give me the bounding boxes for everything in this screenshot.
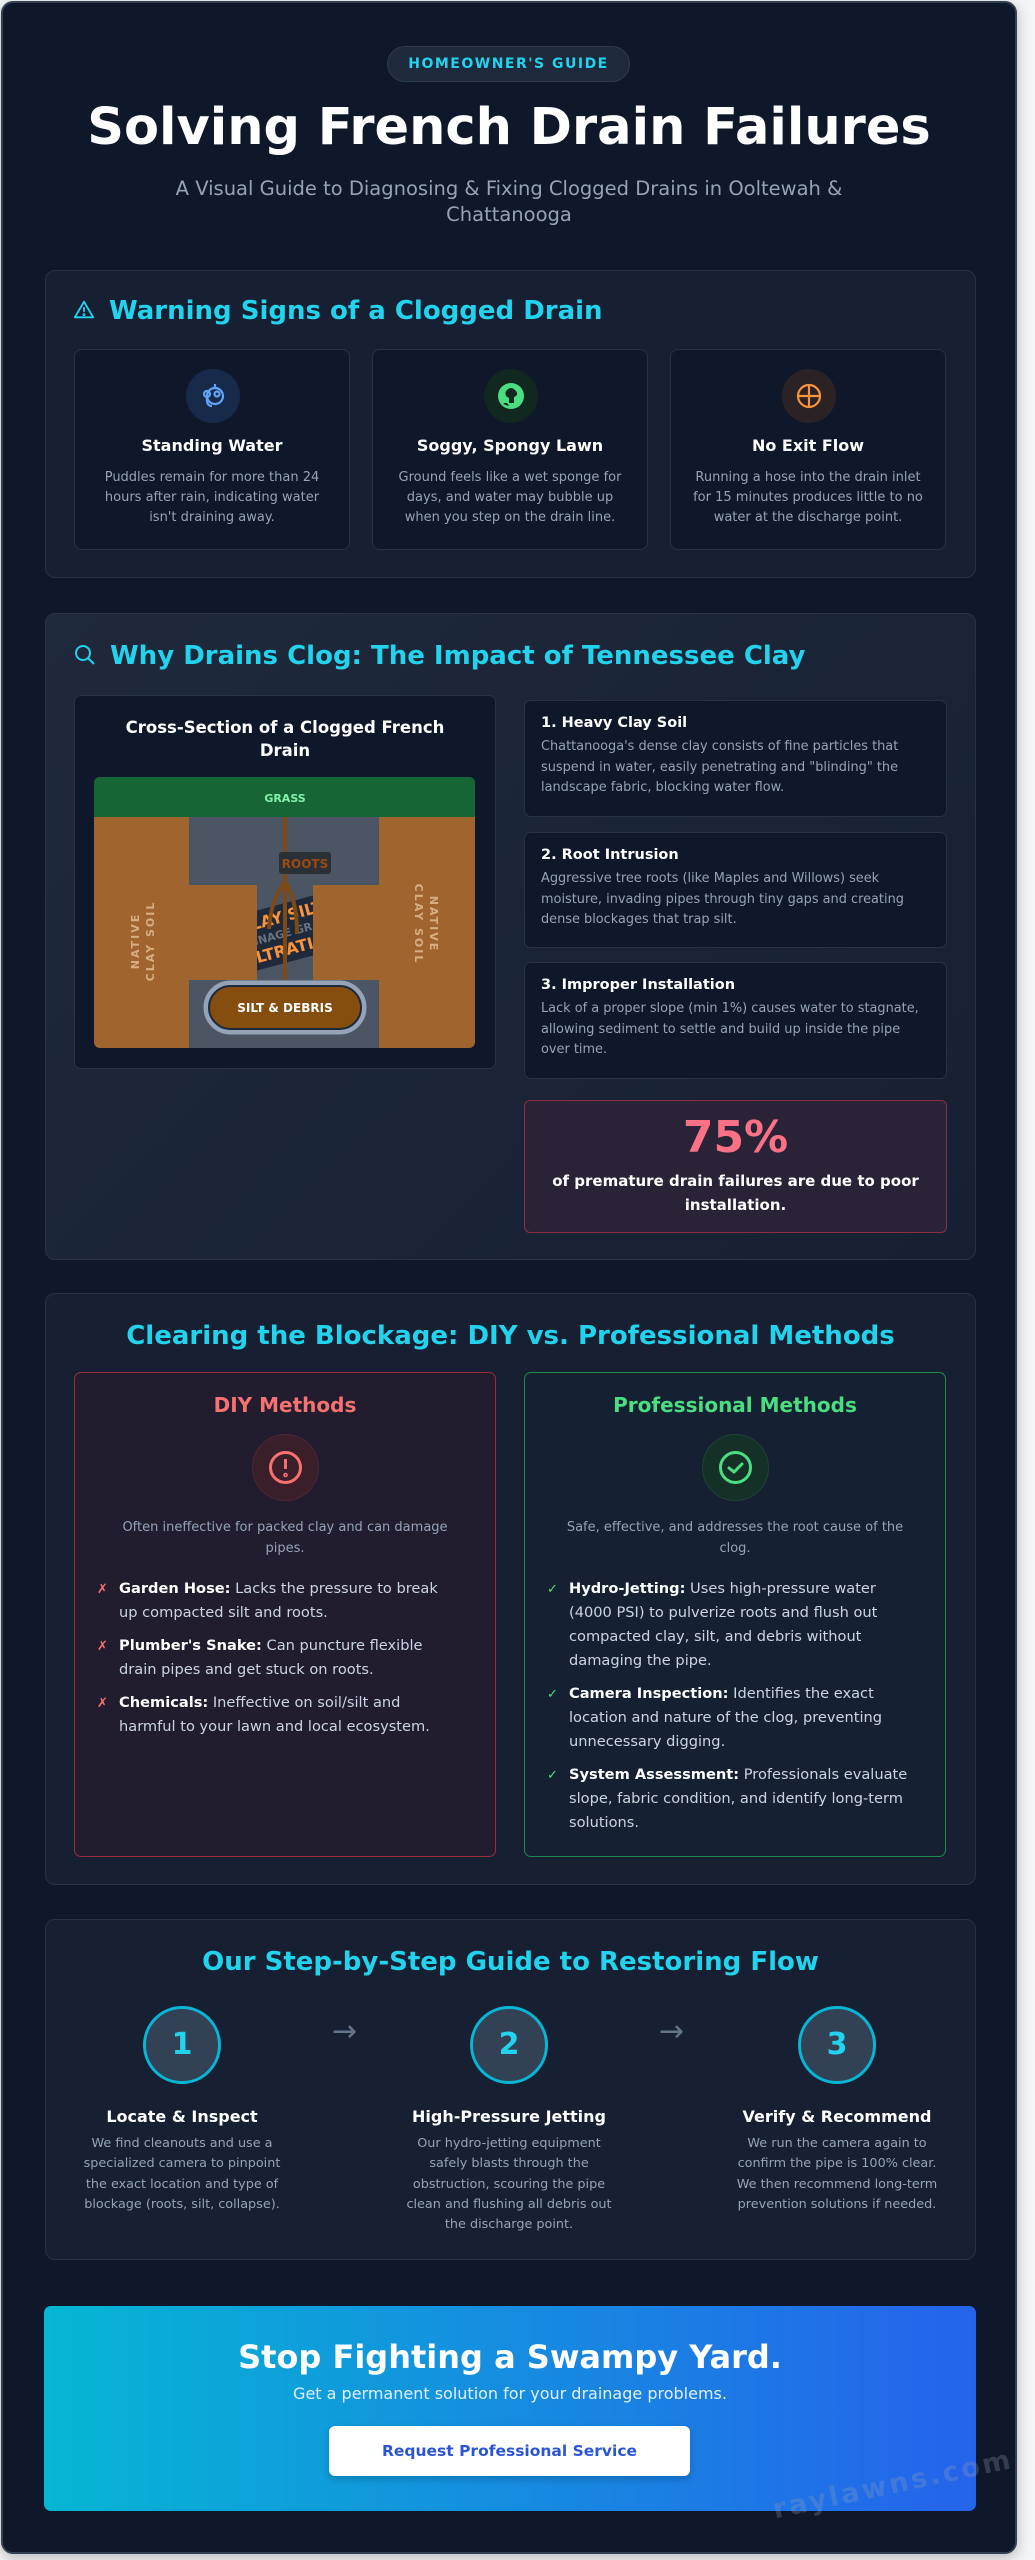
card: DIY methods: DIY Methods [214, 1393, 356, 1417]
stat callout: 75%: of premature drain failures are due to poor installation. [552, 1172, 919, 1214]
cause: improper installation [524, 962, 947, 1079]
card: professional methods: ✓ [547, 1582, 558, 1597]
cross-section diagram: CLAY SILT [237, 897, 325, 937]
cross-section diagram: CLAY SOIL [412, 884, 425, 964]
panel: why drains clog [45, 613, 976, 1260]
card: no exit flow: Running a hose into the drain inlet for 15 minutes produces little to no water at the discharge point. [693, 470, 923, 525]
cross-section diagram: CLAY SOIL [144, 901, 157, 981]
heading: warning signs: Warning Signs of a Clogged Drain [109, 296, 603, 326]
step 2: 2 [499, 2027, 519, 2062]
cause: heavy clay: Chattanooga's dense clay consists of fine particles that suspend in water, easily penetrating and "blinding" the landscape fabric, blocking water flow. [541, 739, 898, 795]
cause: heavy clay [524, 700, 947, 817]
step 3 [737, 2006, 937, 2212]
panel: warning signs [45, 270, 976, 578]
step 1: We find cleanouts and use a specialized camera to pinpoint the exact location and type of blockage (roots, silt, collapse). [84, 2136, 280, 2212]
heading: why drains clog: Why Drains Clog: The Impact of Tennessee Clay [110, 641, 806, 671]
icon: water [186, 369, 240, 423]
stat callout: 75% [524, 1100, 947, 1233]
card: DIY methods: ✗ [97, 1696, 108, 1711]
card: DIY methods: Garden Hose: Lacks the pressure to break up compacted silt and roots. [119, 1580, 438, 1621]
card: professional methods [524, 1372, 946, 1857]
card: professional methods: ✓ [547, 1687, 558, 1702]
card: professional methods: ✓ [547, 1768, 558, 1783]
card: professional methods: Professional Methods [613, 1393, 857, 1417]
diagram title: Cross-Section of a Clogged French Drain [126, 718, 444, 760]
card: no exit flow: No Exit Flow [752, 436, 864, 455]
cause: root intrusion: 2. Root Intrusion [541, 847, 679, 863]
panel: step-by-step guide [45, 1919, 976, 2260]
cross-section diagram: NATIVE [427, 896, 440, 952]
card: standing water [74, 349, 350, 550]
CTA banner [44, 2306, 976, 2511]
panel: DIY vs professional [45, 1293, 976, 1885]
CTA button [329, 2426, 690, 2476]
cross-section diagram: DRAINAGE GRAVEL [227, 912, 343, 955]
step 1: 1 [172, 2027, 192, 2062]
card: DIY methods [74, 1372, 496, 1857]
heading: step-by-step: Our Step-by-Step Guide to Restoring Flow [202, 1947, 819, 1977]
card: standing water: Standing Water [142, 436, 282, 455]
icon: check [702, 1434, 769, 1501]
cause: improper installation: Lack of a proper slope (min 1%) causes water to stagnate, allowing sediment to settle and build up inside the pipe over time. [541, 1001, 919, 1057]
card: soggy lawn: Ground feels like a wet sponge for days, and water may bubble up when you step on the drain line. [399, 470, 621, 525]
cross-section diagram: FILTRATION [237, 926, 342, 971]
icon: no flow [782, 369, 836, 423]
cause: root intrusion [524, 832, 947, 948]
step 1: Locate & Inspect [106, 2107, 258, 2126]
card: DIY methods: ✗ [97, 1639, 108, 1654]
watermark: raylawns.com [770, 2444, 1016, 2525]
cross-section diagram: GRASS [264, 792, 306, 805]
card: professional methods: Safe, effective, and addresses the root cause of the clog. [567, 1520, 903, 1556]
step 3: 3 [827, 2027, 847, 2062]
icon: lawn [484, 369, 538, 423]
cause: improper installation: 3. Improper Installation [541, 977, 735, 993]
CTA button: Request Professional Service [382, 2442, 637, 2460]
stat callout: 75%: 75% [683, 1112, 788, 1163]
card: no exit flow [670, 349, 946, 550]
step 3: We run the camera again to confirm the pipe is 100% clear. We then recommend long-term prevention solutions if needed. [737, 2136, 937, 2212]
title: Solving French Drain Failures [87, 98, 931, 157]
card: standing water: Puddles remain for more than 24 hours after rain, indicating water isn't draining away. [105, 470, 319, 525]
step 2 [406, 2006, 612, 2232]
heading: clearing the blockage: Clearing the Blockage: DIY vs. Professional Methods [126, 1321, 895, 1351]
badge [387, 46, 630, 82]
CTA subtext: Get a permanent solution for your drainage problems. [293, 2384, 727, 2403]
step 1 [84, 2006, 280, 2212]
arrow 1: → [332, 2014, 357, 2049]
cross-section diagram [94, 777, 475, 1048]
cross-section diagram: ROOTS [282, 857, 328, 871]
step 2: Our hydro-jetting equipment safely blasts through the obstruction, scouring the pipe clean and flushing all debris out the discharge point. [406, 2136, 612, 2232]
cause: heavy clay: 1. Heavy Clay Soil [541, 715, 687, 731]
badge: HOMEOWNER'S GUIDE [408, 56, 609, 72]
cross-section diagram: NATIVE [129, 913, 142, 969]
arrow 2: → [659, 2014, 684, 2049]
diagram card [74, 695, 496, 1069]
step 3: Verify & Recommend [743, 2107, 931, 2126]
card: soggy lawn [372, 349, 648, 550]
card: DIY methods: Often ineffective for packed clay and can damage pipes. [122, 1520, 448, 1556]
card: professional methods: Hydro-Jetting: Uses high-pressure water (4000 PSI) to pulverize roots and flush out compacted clay, silt, and debris without damaging the pipe. [569, 1580, 877, 1669]
card: DIY methods: Plumber's Snake: Can puncture flexible drain pipes and get stuck on roots. [119, 1637, 422, 1678]
step 2: High-Pressure Jetting [412, 2107, 606, 2126]
icon: warning [252, 1434, 319, 1501]
card: DIY methods: ✗ [97, 1582, 108, 1597]
cause: root intrusion: Aggressive tree roots (like Maples and Willows) seek moisture, invading pipes through tiny gaps and creating dense blockages that trap silt. [541, 871, 904, 927]
card: professional methods: System Assessment: Professionals evaluate slope, fabric condition, and identify long-term solutions. [569, 1766, 907, 1831]
subtitle: A Visual Guide to Diagnosing & Fixing Clogged Drains in Ooltewah & Chattanooga [176, 177, 842, 226]
card: soggy lawn: Soggy, Spongy Lawn [417, 436, 603, 455]
card: professional methods: Camera Inspection: Identifies the exact location and nature of the clog, preventing unnecessary digging. [569, 1685, 882, 1750]
cross-section diagram: SILT & DEBRIS [237, 1001, 333, 1015]
card: DIY methods: Chemicals: Ineffective on soil/silt and harmful to your lawn and local ecosystem. [119, 1694, 430, 1735]
CTA heading: Stop Fighting a Swampy Yard. [238, 2338, 782, 2376]
